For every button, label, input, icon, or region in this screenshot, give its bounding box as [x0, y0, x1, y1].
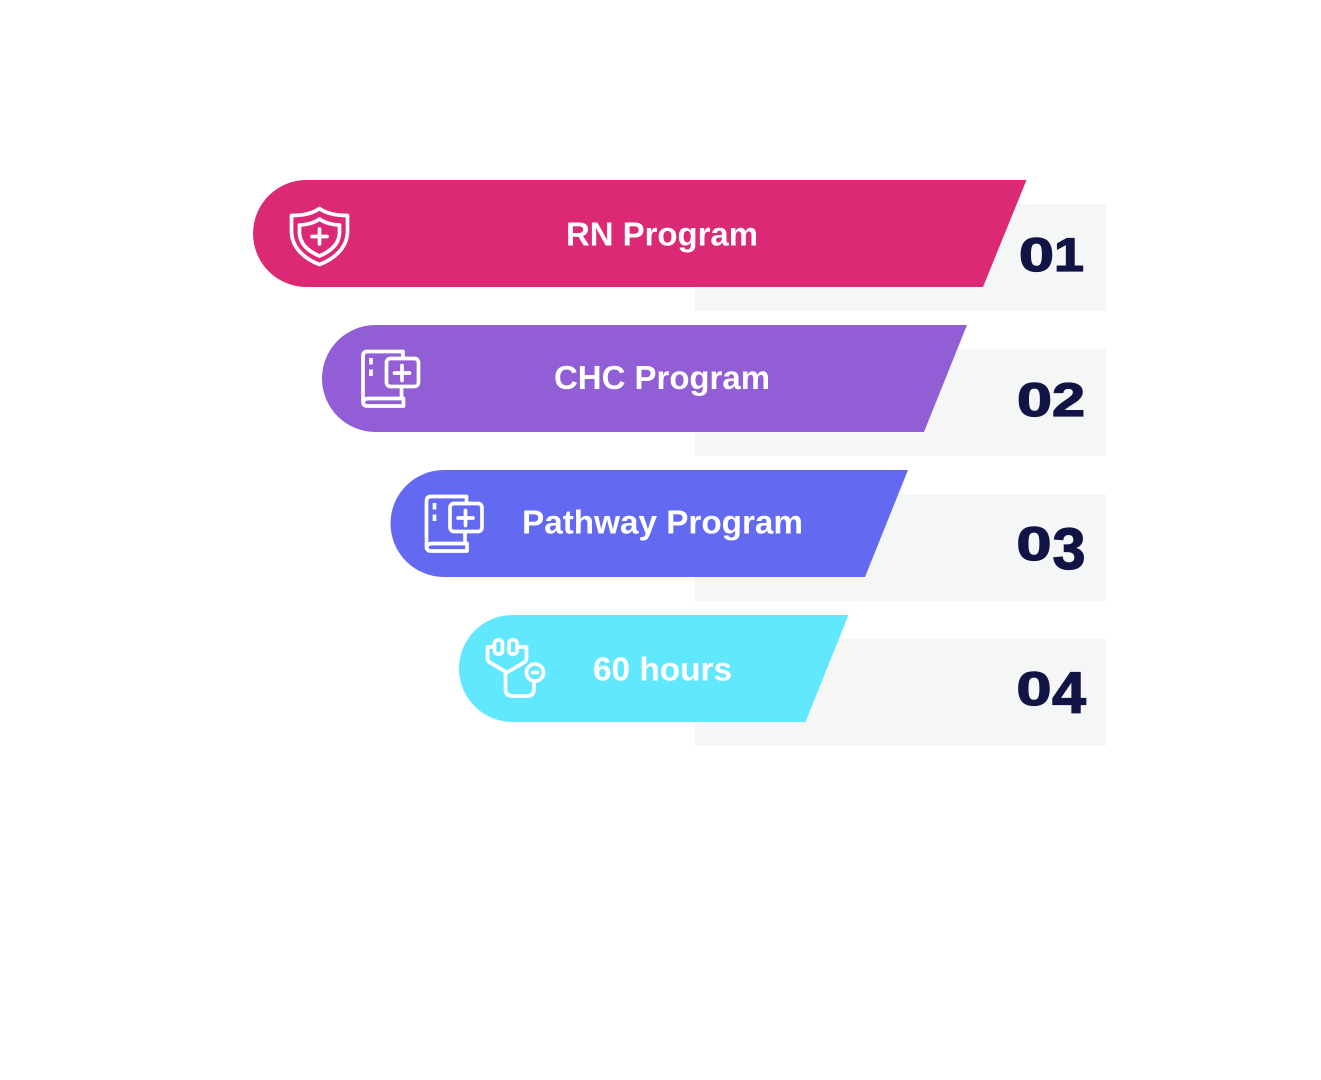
number panel 01: 0 — [1019, 228, 1054, 281]
row 2: CHC Program — [322, 325, 1106, 456]
icon: medical book — [426, 496, 482, 551]
row 3: Pathway Program — [390, 470, 1106, 601]
number panel 02: 2 — [1052, 373, 1085, 426]
number panel 01: 1 — [1054, 228, 1084, 281]
label: RN Program: RN Program — [566, 216, 758, 254]
number panel 04: 4 — [1052, 660, 1086, 726]
number panel 03: 3 — [1052, 517, 1086, 582]
label: 60 hours: 60 hours — [593, 652, 732, 688]
row 4: 60 hours — [459, 615, 1106, 746]
number panel 03 — [695, 494, 1106, 601]
number panel 03: 0 — [1016, 517, 1052, 570]
number panel 02: 0 — [1017, 373, 1052, 426]
ribbon 3 — [390, 470, 908, 577]
number panel 04 — [695, 639, 1106, 746]
icon: stethoscope — [488, 640, 544, 696]
ribbon 1 — [253, 180, 1026, 287]
icon: medical book — [363, 352, 418, 406]
ribbon 4 — [459, 615, 848, 722]
number panel 01 — [695, 204, 1106, 311]
label: Pathway Program: Pathway Program — [522, 504, 803, 542]
row 1: RN Program — [253, 180, 1106, 311]
icon: shield with cross — [292, 208, 348, 264]
number panel 02 — [695, 349, 1106, 456]
label: CHC Program: CHC Program — [554, 360, 770, 397]
number panel 04: 0 — [1016, 662, 1052, 715]
ribbon 2 — [322, 325, 967, 432]
